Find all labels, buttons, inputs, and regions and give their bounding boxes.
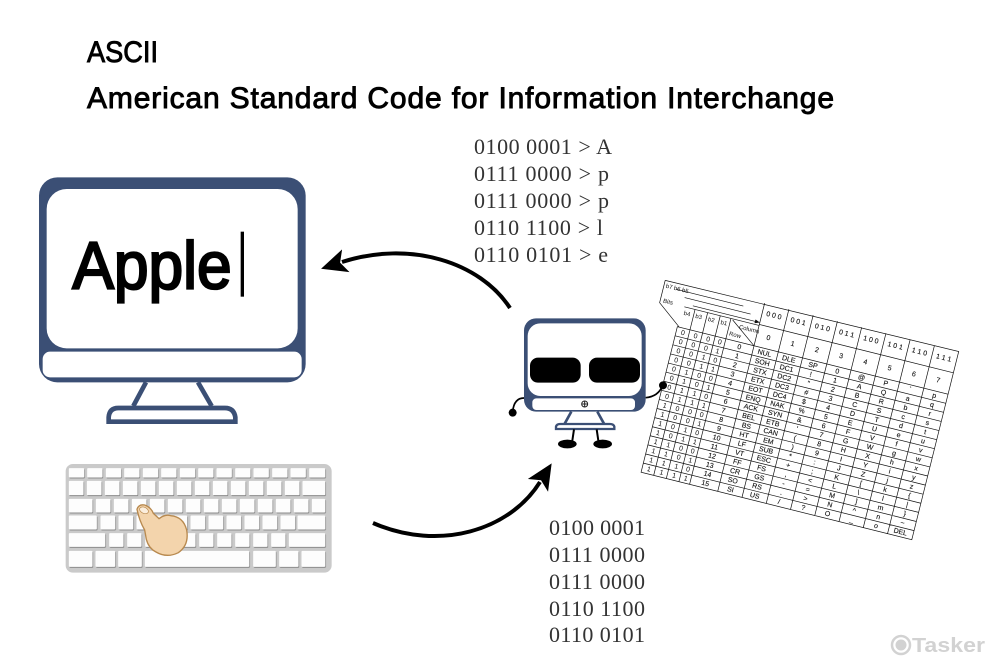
table column 3: : <box>813 459 816 467</box>
table column 2: ' <box>796 426 799 433</box>
table column 4: C <box>851 401 858 409</box>
ASCII code table <box>619 278 959 540</box>
table header labels: Column <box>738 325 760 336</box>
binary to character decoding text: 0100 0001 > A <box>474 134 612 159</box>
binary to character decoding text <box>474 134 612 267</box>
table header labels: 7 <box>935 377 941 385</box>
table column 1: SYN <box>767 409 783 420</box>
table bit patterns: 0000 <box>680 330 723 347</box>
table row numbers: 2 <box>732 362 737 370</box>
binary to character decoding text: 0111 0000 > p <box>474 161 609 186</box>
table header labels <box>657 284 953 391</box>
table bit patterns: 0110 <box>666 384 709 401</box>
table column 4: G <box>842 438 849 446</box>
table header labels: 3 <box>838 353 844 361</box>
table bit patterns: 1100 <box>653 439 695 456</box>
table column 4: E <box>847 420 853 428</box>
table row numbers: 15 <box>701 480 710 488</box>
table row numbers: 4 <box>727 380 733 388</box>
table column 0: ACK <box>743 403 759 414</box>
table column 7: t <box>923 429 927 436</box>
table column 6: g <box>891 450 897 458</box>
table column 5: Z <box>860 471 867 479</box>
table column 4: O <box>824 510 831 519</box>
table column 5: Q <box>880 389 887 397</box>
table bit patterns: 1010 <box>657 421 700 438</box>
table column 1: CAN <box>762 428 778 438</box>
table column 2: * <box>788 453 793 461</box>
table bit patterns: 0111 <box>664 393 707 410</box>
table column 3: 6 <box>821 423 826 431</box>
legs and feet <box>572 429 598 441</box>
table column 5: \ <box>857 490 860 497</box>
table bit patterns: 1001 <box>660 412 702 428</box>
table bit patterns: 0001 <box>678 339 720 356</box>
table column 3: = <box>805 486 810 494</box>
table column 7: u <box>920 438 926 446</box>
table column 4: K <box>833 474 840 482</box>
table column 7: x <box>913 465 919 473</box>
table column 7: y <box>911 474 917 482</box>
arrow: keyboard to robot <box>373 482 540 536</box>
table column 0: ETX <box>750 376 765 386</box>
arrow: robot to monitor <box>342 253 510 308</box>
table column 1: DLE <box>781 355 796 365</box>
table bit patterns: 1011 <box>655 430 698 447</box>
table column 1: GS <box>753 474 765 483</box>
table column 4: L <box>831 483 837 491</box>
table column 7: p <box>931 392 937 400</box>
table column 7: s <box>925 420 930 427</box>
table column 4: D <box>849 410 856 418</box>
table bit patterns: 0100 <box>671 366 713 383</box>
hand <box>137 505 187 555</box>
table column 1: DC4 <box>772 391 787 401</box>
table bit patterns: 0010 <box>676 348 718 365</box>
table column 3: 7 <box>819 432 824 440</box>
table header labels: 5 <box>887 365 892 373</box>
table bit patterns: 1101 <box>651 448 693 465</box>
table column 5: P <box>883 380 889 388</box>
table row numbers: 5 <box>725 389 731 397</box>
table column 1: US <box>749 492 760 501</box>
table row numbers: 10 <box>712 434 721 443</box>
table header labels: b3 <box>695 314 703 321</box>
binary to character decoding text: 0110 0101 > e <box>474 242 608 267</box>
table column 0: EOT <box>747 385 764 396</box>
table column 1: EM <box>762 437 774 446</box>
table column 4: I <box>839 456 843 464</box>
table column 2: . <box>779 490 783 497</box>
table column 3: 5 <box>823 414 829 421</box>
binary input text: 0110 1100 <box>549 596 645 621</box>
table bit patterns: 1000 <box>662 402 704 419</box>
table column 4: N <box>826 501 833 509</box>
table row numbers: 0 <box>736 344 742 352</box>
table column 5: _ <box>848 516 854 524</box>
table row numbers: 6 <box>723 398 728 406</box>
table column 0: NUL <box>757 349 772 359</box>
table column 4: H <box>840 447 847 455</box>
table header labels: b7 b6 b5 <box>665 284 690 295</box>
table column 2: ( <box>793 435 797 443</box>
table column 3: ; <box>810 468 814 476</box>
table column 6: c <box>901 414 906 421</box>
table header labels: 4 <box>862 359 868 367</box>
table column 6: n <box>875 514 881 521</box>
watermark: Tasker logo: Tasker <box>912 635 985 657</box>
table row numbers: 7 <box>721 407 726 415</box>
table header labels: 0 0 1 <box>790 317 807 328</box>
table column 4: @ <box>857 374 866 382</box>
binary input text <box>549 515 645 647</box>
table bit patterns: 0011 <box>673 357 716 374</box>
table column 7: DEL <box>893 528 908 538</box>
binary input text: 0110 0101 <box>549 622 645 647</box>
table column 2: % <box>798 407 805 416</box>
table header labels: b4 <box>683 311 691 319</box>
table column 5: ^ <box>851 508 857 515</box>
table column 6: k <box>882 486 888 494</box>
subtitle: full name: American Standard Code for Information Interchange <box>87 82 834 115</box>
table row numbers: 13 <box>705 461 714 470</box>
table header labels: Bits <box>662 299 673 307</box>
table column 0: ENQ <box>745 394 762 405</box>
table column 2: SP <box>807 361 819 371</box>
table column 1: RS <box>751 483 763 492</box>
table column 1: NAK <box>769 400 785 411</box>
binary input text: 0100 0001 <box>549 515 645 540</box>
table column 2: " <box>806 380 811 388</box>
table header labels: b1 <box>720 320 728 328</box>
table column 2: ) <box>790 444 794 452</box>
table column 7: w <box>914 456 923 464</box>
table row numbers: 14 <box>703 471 712 479</box>
table column 6: m <box>877 504 884 513</box>
table column 7: ~ <box>900 520 905 527</box>
table column 2: ! <box>809 371 812 379</box>
table bit patterns: 1110 <box>648 457 691 474</box>
table header labels: 1 1 0 <box>911 347 928 358</box>
table column 1: FS <box>756 465 767 474</box>
table column 6: e <box>896 432 901 440</box>
table column 3: 9 <box>814 450 820 458</box>
table column 3: 3 <box>828 395 833 403</box>
table column 0: HT <box>739 431 750 440</box>
table column 5: ] <box>854 499 858 506</box>
table header labels: 0 0 0 <box>765 311 782 322</box>
table column 0: BEL <box>741 413 756 423</box>
table bit patterns: 1111 <box>646 466 689 483</box>
icon: keyboard with pressing finger <box>66 464 332 573</box>
binary to character decoding text: 0111 0000 > p <box>474 188 609 213</box>
table column 7: | <box>905 502 909 509</box>
table column 5: V <box>869 435 875 443</box>
table column 6: b <box>903 405 908 412</box>
table column 3: 2 <box>830 386 835 394</box>
table row numbers: 11 <box>710 443 719 452</box>
table column 2: $ <box>801 399 807 406</box>
table column 4: A <box>856 383 863 391</box>
table column 6: i <box>888 468 892 476</box>
table bit patterns: 0101 <box>669 375 711 392</box>
table column 7: { <box>907 493 912 500</box>
table column 1: DC1 <box>779 364 794 374</box>
binary to character decoding text: 0110 1100 > l <box>474 215 603 240</box>
table column 2: , <box>784 471 788 479</box>
table column 6: h <box>889 459 895 467</box>
table column 5: R <box>878 398 884 406</box>
icon: robot computer character with sunglasses <box>509 318 667 448</box>
arms <box>513 385 663 412</box>
table header labels: Row <box>728 332 742 340</box>
table column 1: ESC <box>756 455 772 465</box>
table row numbers: 3 <box>730 371 735 379</box>
table column 0: SOH <box>754 358 770 368</box>
table column 4: M <box>828 492 836 500</box>
typed word: Apple <box>72 228 232 303</box>
table column 0: LF <box>737 440 746 449</box>
table column 0: SO <box>727 477 739 486</box>
table column 4: F <box>845 429 851 437</box>
table column 3: < <box>807 477 813 485</box>
table column 5: [ <box>859 481 863 488</box>
table column 6: f <box>895 441 898 448</box>
table column 7: q <box>929 401 935 409</box>
table header labels: 2 <box>814 347 820 355</box>
table column 4: B <box>854 392 860 400</box>
table column 7: r <box>928 411 932 418</box>
table column 0: SI <box>726 486 734 494</box>
table column 7: v <box>918 447 924 455</box>
table header labels: b2 <box>707 317 716 325</box>
table column 5: Y <box>862 462 869 470</box>
table column 0: STX <box>752 367 768 377</box>
table header labels: 1 0 1 <box>887 341 904 352</box>
table row numbers: 9 <box>716 426 722 433</box>
table column 7: z <box>909 483 915 491</box>
table column 1: DC3 <box>774 382 790 392</box>
table header labels: 6 <box>911 371 917 379</box>
table row numbers: 8 <box>718 416 724 424</box>
table header labels: 0 1 0 <box>814 323 831 334</box>
table column 2: / <box>777 499 781 506</box>
table column 6: d <box>898 423 904 430</box>
table column 3: 4 <box>825 405 831 412</box>
table column 2: + <box>785 462 791 470</box>
table column 1: SUB <box>758 446 774 456</box>
table row numbers: 1 <box>734 353 740 361</box>
table column 3: ? <box>800 505 806 512</box>
table column 4: J <box>836 465 841 473</box>
table column 1: DC2 <box>776 373 792 383</box>
table column 6: l <box>881 496 885 503</box>
table column 3: 1 <box>832 377 838 385</box>
title: ASCII: ASCII <box>87 36 158 69</box>
table header labels: 1 1 1 <box>935 353 952 364</box>
table column 5: W <box>866 444 874 452</box>
table column 5: U <box>871 426 878 434</box>
table column 0: FF <box>732 459 742 467</box>
table column 3: 8 <box>816 441 822 449</box>
table column 0: CR <box>729 467 741 477</box>
table column 6: o <box>873 523 879 530</box>
sunglasses <box>530 358 640 383</box>
table column 0: BS <box>741 422 752 431</box>
table header labels: 0 <box>765 335 771 342</box>
table column 5: S <box>876 407 882 415</box>
text cursor <box>241 232 244 297</box>
binary input text: 0111 0000 <box>549 569 645 594</box>
table column 6: j <box>885 477 889 485</box>
table column 3: 0 <box>834 368 840 376</box>
table header labels: 0 1 1 <box>838 329 855 340</box>
table column 0: VT <box>734 449 745 459</box>
table row numbers: 12 <box>707 452 717 461</box>
table column 6: ` <box>908 387 912 394</box>
binary input text: 0111 0000 <box>549 542 645 567</box>
table header labels: 1 0 0 <box>862 335 879 346</box>
table column 5: X <box>864 453 871 461</box>
watermark: Tasker logo <box>892 635 985 657</box>
table column 7: } <box>903 511 907 518</box>
icon: desktop monitor showing Apple <box>39 177 306 422</box>
table column 3: > <box>803 495 808 503</box>
table column 5: T <box>874 417 880 425</box>
table column 6: a <box>905 395 910 403</box>
table column 1: ETB <box>765 419 781 429</box>
table column 2: & <box>796 417 803 425</box>
table header labels: 1 <box>790 341 795 348</box>
table column 2: - <box>781 481 786 488</box>
table column 2: # <box>803 389 809 397</box>
